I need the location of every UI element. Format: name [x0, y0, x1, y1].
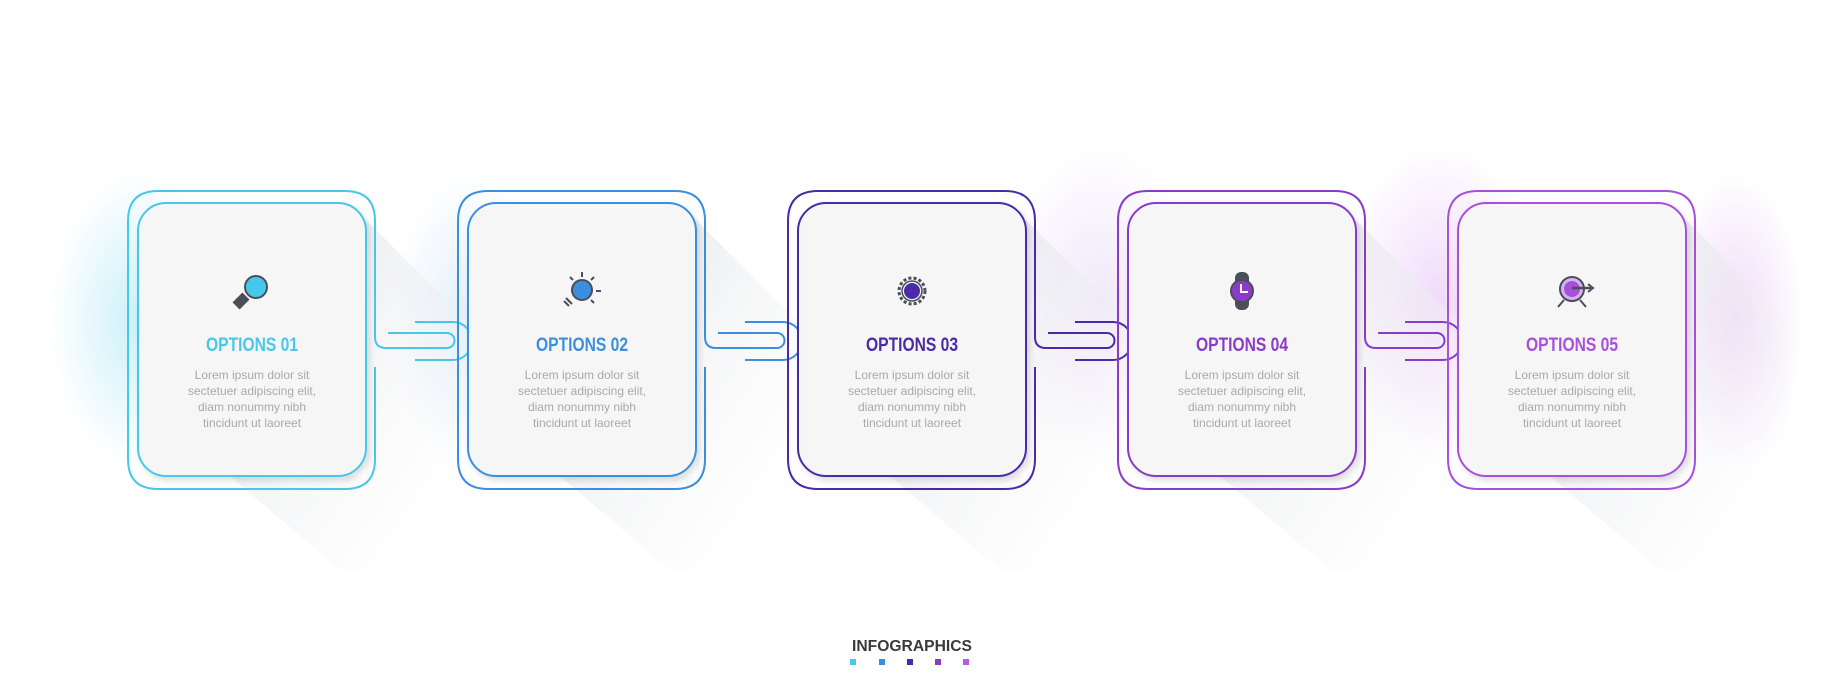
- card 1: Lorem ipsum dolor sit: [195, 368, 310, 382]
- icon: bulb: [564, 272, 601, 306]
- card 3: diam nonummy nibh: [858, 400, 966, 414]
- card 1: sectetuer adipiscing elit,: [188, 384, 316, 398]
- icon: gear: [899, 278, 925, 304]
- card 5: diam nonummy nibh: [1518, 400, 1626, 414]
- card 1: OPTIONS 01: [206, 335, 298, 356]
- card 1: diam nonummy nibh: [198, 400, 306, 414]
- card 2: tincidunt ut laoreet: [533, 416, 632, 430]
- card 4: Lorem ipsum dolor sit: [1185, 368, 1300, 382]
- card 3: tincidunt ut laoreet: [863, 416, 962, 430]
- card 1: [128, 191, 472, 489]
- icon: watch: [1231, 272, 1253, 310]
- card 2: Lorem ipsum dolor sit: [525, 368, 640, 382]
- card 1: tincidunt ut laoreet: [203, 416, 302, 430]
- card 4: OPTIONS 04: [1196, 335, 1288, 356]
- card 5: Lorem ipsum dolor sit: [1515, 368, 1630, 382]
- connector 4-5: [1365, 322, 1462, 360]
- card 2: OPTIONS 02: [536, 335, 628, 356]
- long shadows: [230, 220, 1790, 570]
- card 2: sectetuer adipiscing elit,: [518, 384, 646, 398]
- card 4: [1118, 191, 1462, 489]
- card 2: [458, 191, 802, 489]
- card 5: tincidunt ut laoreet: [1523, 416, 1622, 430]
- footer dots: [850, 659, 969, 665]
- card 2: diam nonummy nibh: [528, 400, 636, 414]
- card 4: diam nonummy nibh: [1188, 400, 1296, 414]
- card 5: [1448, 191, 1695, 489]
- card 4: sectetuer adipiscing elit,: [1178, 384, 1306, 398]
- card 5: sectetuer adipiscing elit,: [1508, 384, 1636, 398]
- card 3: OPTIONS 03: [866, 335, 958, 356]
- icon: target: [1558, 277, 1593, 307]
- connector 2-3: [705, 322, 802, 360]
- card 4: tincidunt ut laoreet: [1193, 416, 1292, 430]
- card 3: sectetuer adipiscing elit,: [848, 384, 976, 398]
- footer title: INFOGRAPHICS: [852, 638, 972, 655]
- card 5: OPTIONS 05: [1526, 335, 1618, 356]
- background glows: [50, 140, 1805, 470]
- card 3: [788, 191, 1132, 489]
- icon: magnifier: [233, 276, 267, 309]
- card 3: Lorem ipsum dolor sit: [855, 368, 970, 382]
- connector 3-4: [1035, 322, 1132, 360]
- connector 1-2: [375, 322, 472, 360]
